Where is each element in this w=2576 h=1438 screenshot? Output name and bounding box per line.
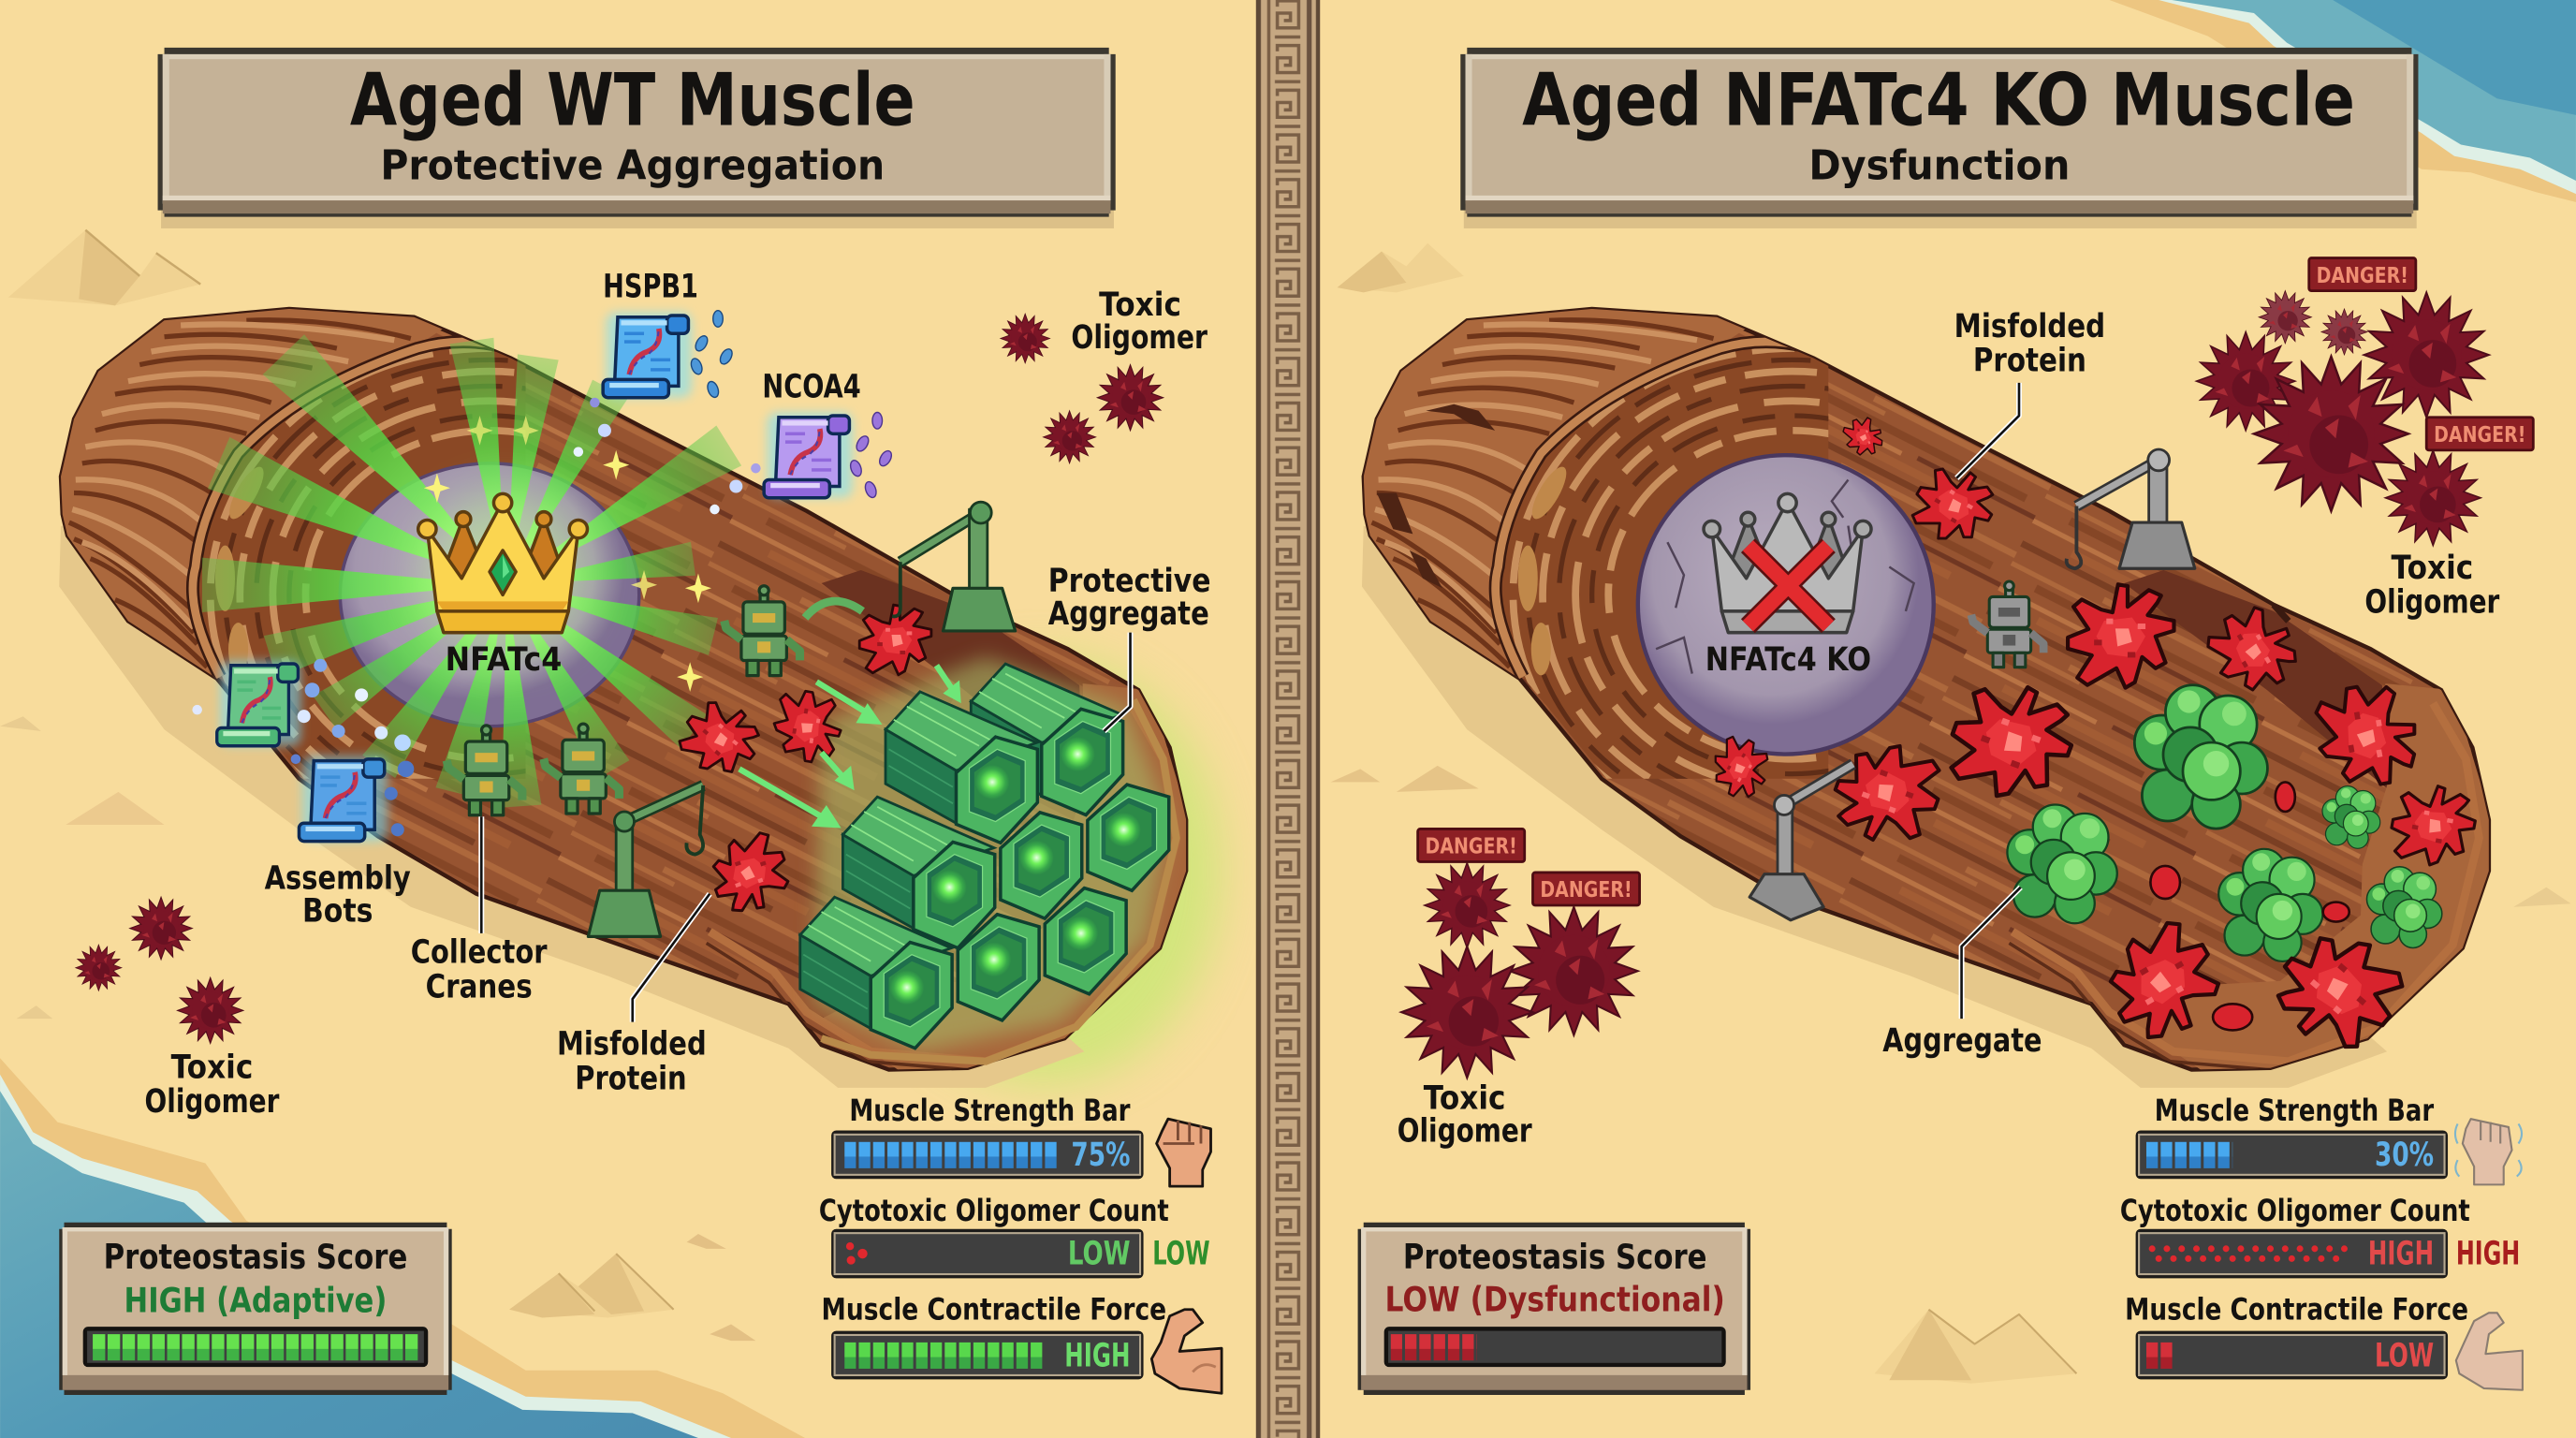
hexagonal protective aggregate [800,664,1169,1049]
toxic oligomers bottom [76,897,243,1043]
label: protective aggregate: Protective [1048,562,1211,600]
leader: misfolded protein [633,894,710,1022]
collector crane upper [892,502,1016,631]
cytotoxic oligomer count: HIGH [2368,1234,2434,1272]
label: collector cranes: Collector [411,932,548,971]
crown: NFATc4 [418,493,587,633]
danger tag lower [1532,873,1640,905]
label: misfolded protein: Protein [1973,342,2086,380]
label: protective aggregate [1048,562,1211,633]
title text: Aged WT Muscle [350,58,915,142]
ocean bottom-left [0,1058,805,1438]
label: collector cranes: Cranes [426,967,533,1005]
label: toxic oligomer bottom [1398,1079,1532,1151]
muscle strength bar: 75% [1071,1136,1131,1174]
protective glow on log end [813,657,1170,1051]
icon: weak fist [2455,1119,2522,1184]
label: toxic oligomer bottom: Oligomer [1398,1112,1532,1151]
muscle contractile force: Muscle Contractile Force [822,1291,1166,1327]
icon: flexed arm [1151,1310,1222,1393]
ocean top-right [2110,0,2576,202]
icon: weak arm [2456,1313,2523,1390]
leader: protective aggregate [1104,633,1131,731]
metric bars left [819,1093,1222,1393]
green rays [202,334,741,808]
scroll: NCOA4 [764,413,894,499]
danger tag left [1418,829,1525,862]
collector crane upper [2067,449,2195,568]
cytotoxic oligomer count: Cytotoxic Oligomer Count [819,1193,1169,1228]
label: NFATc4: NFATc4 [446,640,562,679]
label: assembly bots: Bots [302,892,373,931]
label: toxic oligomer top: Oligomer [1071,318,1208,357]
label: toxic oligomer bottom: Toxic [171,1048,253,1086]
label: toxic oligomer bottom [145,1048,280,1121]
title plaque left [158,48,1116,228]
grey crown with red X [1704,493,1871,633]
subtitle text: Protective Aggregation [380,141,885,189]
collector crane lower [588,785,703,936]
label: toxic oligomer top: Toxic [2392,549,2473,587]
label: misfolded protein: Misfolded [557,1025,707,1064]
scroll: HSPB1 [603,311,735,399]
assembly bot [1971,581,2043,668]
label: aggregate: Aggregate [1882,1021,2042,1060]
danger tag top: DANGER! [2317,264,2408,288]
assembly bots [446,586,799,815]
muscle fiber log [1362,296,2502,1088]
proteostasis score left: HIGH (Adaptive) [124,1280,387,1320]
muscle contractile force [822,1291,1166,1379]
danger tag left: DANGER! [1426,835,1517,859]
muscle strength bar: 30% [2375,1136,2434,1174]
muscle fiber log [59,296,1199,1088]
danger tag lower: DANGER! [1540,878,1632,902]
label: toxic oligomer top [1071,286,1208,357]
cytotoxic oligomer count: Cytotoxic Oligomer Count [2120,1193,2470,1228]
label: misfolded protein: Protein [575,1060,687,1098]
muscle strength bar: Muscle Strength Bar [2155,1093,2434,1128]
danger tag top [2309,258,2416,291]
protein aggregates [2007,685,2442,961]
subtitle text: Dysfunction [1808,141,2070,189]
misfolded proteins [1703,413,2480,1068]
label: toxic oligomer top [2364,549,2500,622]
nucleus [1638,455,1934,755]
muscle contractile force: Muscle Contractile Force [2125,1291,2468,1327]
cytotoxic oligomer count [819,1193,1210,1278]
label: HSPB1: HSPB1 [603,268,698,306]
end glow [866,657,1221,1084]
scroll: blue [299,756,388,842]
sparkles [424,416,711,692]
central greek-key divider [1256,0,1320,1438]
label: misfolded protein [1954,307,2105,380]
label: toxic oligomer top: Oligomer [2364,583,2500,622]
danger tag right: DANGER! [2434,423,2525,448]
misfolded proteins [670,605,931,920]
scar marks [1377,404,1495,588]
nucleus [340,463,639,726]
toxic oligomer cluster bottom [1401,862,1638,1078]
leader: collector cranes [480,816,483,933]
leader: aggregate [1962,888,2021,1019]
proteostasis score right: Proteostasis Score [1403,1237,1707,1277]
cytotoxic oligomer count: LOW [1068,1234,1131,1272]
leader: misfolded protein [1956,383,2019,478]
proteostasis score right: LOW (Dysfunctional) [1385,1280,1725,1320]
muscle contractile force: HIGH [1064,1336,1131,1374]
green arrows [739,601,961,829]
label: toxic oligomer bottom: Toxic [1424,1079,1506,1118]
cytotoxic oligomer count [2120,1193,2520,1278]
label: NCOA4: NCOA4 [762,368,861,406]
label: assembly bots: Assembly [265,858,411,897]
icon: fist [1157,1119,1211,1186]
danger tag right [2426,418,2533,450]
cytotoxic oligomer count: LOW [1152,1234,1210,1272]
scroll: green [217,661,301,746]
label: toxic oligomer bottom: Oligomer [145,1082,280,1121]
muscle contractile force [2125,1291,2468,1379]
panel: aged NFATc4 KO muscle [1362,258,2533,1151]
proteostasis score left: Proteostasis Score [104,1237,407,1277]
muscle contractile force: LOW [2375,1336,2434,1374]
title text: Aged NFATc4 KO Muscle [1522,58,2355,142]
muscle strength bar [2136,1093,2448,1179]
muscle strength bar [831,1093,1144,1179]
toxic oligomer cluster top [2197,291,2489,546]
title plaque right [1460,48,2418,228]
toxic oligomers top [1001,314,1164,463]
metric bars right [2120,1093,2523,1390]
collector crane lower [1749,764,1853,920]
label: toxic oligomer top: Toxic [1099,286,1181,324]
label: misfolded protein [557,1025,707,1098]
cytotoxic oligomer count: HIGH [2456,1234,2520,1272]
label: NFATc4 KO: NFATc4 KO [1705,640,1871,679]
proteostasis score right [1358,1223,1750,1395]
proteostasis score left [59,1223,452,1395]
particles [192,398,761,836]
label: misfolded protein: Misfolded [1954,307,2105,345]
panel: aged WT muscle [59,268,1221,1121]
label: protective aggregate: Aggregate [1048,594,1209,633]
label: assembly bots [265,858,411,931]
label: collector cranes [411,932,548,1005]
glowing rim [822,700,1177,1062]
muscle strength bar: Muscle Strength Bar [849,1093,1131,1128]
